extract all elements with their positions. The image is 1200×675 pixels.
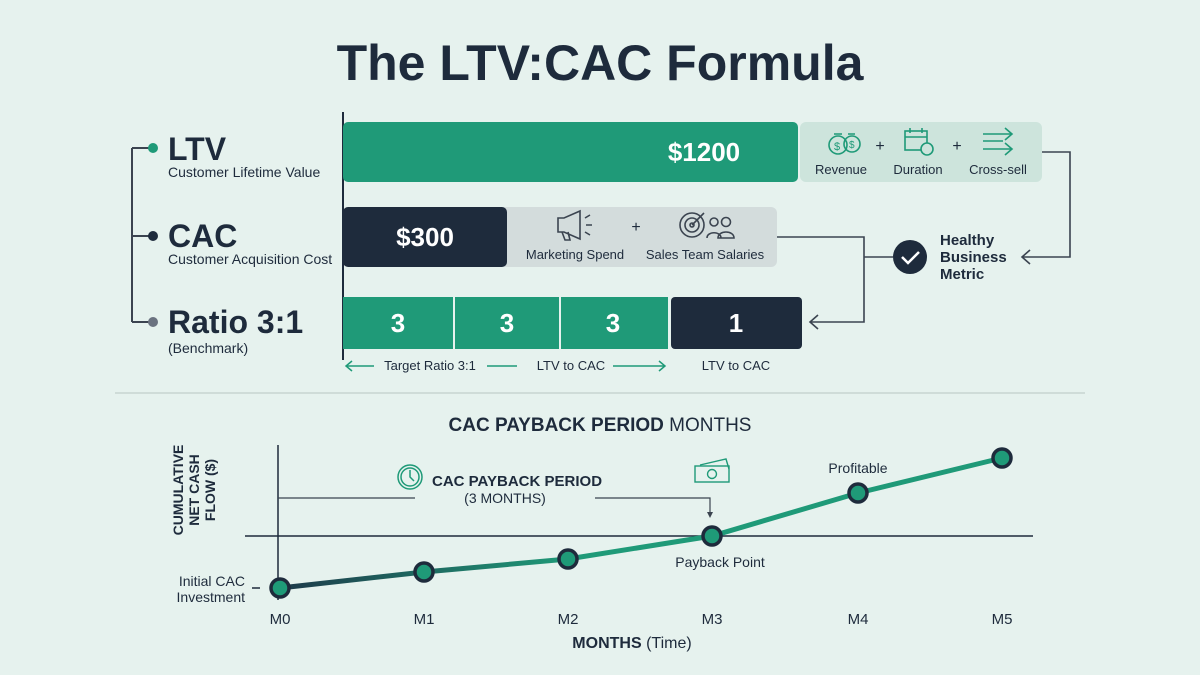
- left bracket with labels: [132, 131, 332, 356]
- ratio labels: Target Ratio 3:1: [384, 358, 476, 373]
- icon: money bags: $: [834, 141, 840, 153]
- line chart: M5: [992, 611, 1012, 628]
- y axis label: CUMULATIVE: [170, 445, 186, 535]
- ratio bars: 3: [500, 308, 514, 338]
- CAC bar: +: [631, 219, 641, 236]
- payback annotation: (3 MONTHS): [464, 490, 546, 506]
- LTV bar: $1200: [668, 137, 740, 167]
- chart title: CAC PAYBACK PERIOD MONTHS: [449, 415, 751, 436]
- callout: healthy business metric: Business: [940, 249, 1007, 266]
- label: Ratio: Ratio 3:1: [168, 304, 303, 340]
- line chart: [170, 445, 1033, 652]
- y axis label: NET CASH: [186, 454, 202, 526]
- label: Ratio: (Benchmark): [168, 340, 248, 356]
- label: CAC: Customer Acquisition Cost: [168, 251, 332, 267]
- icon: clock: [398, 465, 422, 489]
- icon: cash: [695, 459, 729, 482]
- axis line: [342, 112, 344, 360]
- ratio bars: 1: [729, 308, 743, 338]
- line chart: Investment: [177, 589, 245, 605]
- connector arrows: [777, 152, 1070, 329]
- CAC bar: Sales Team Salaries: [646, 247, 765, 262]
- callout: healthy business metric: Metric: [940, 266, 984, 283]
- line chart: MONTHS (Time): [572, 635, 692, 652]
- line chart: M0: [270, 611, 290, 628]
- LTV bar: +: [952, 138, 962, 155]
- label: CAC: CAC: [168, 218, 237, 254]
- label: LTV: [168, 131, 320, 180]
- line chart: M3: [702, 611, 722, 628]
- icon: cross-sell arrows: [983, 128, 1012, 155]
- line chart: M2: [558, 611, 578, 628]
- CAC bar: Marketing Spend: [526, 247, 624, 262]
- callout: healthy business metric: [893, 232, 1007, 283]
- LTV bar: +: [875, 138, 885, 155]
- ratio bars: 3: [391, 308, 405, 338]
- CAC bar: [343, 207, 777, 267]
- line chart: Initial CAC: [179, 573, 245, 589]
- LTV bar: Revenue: [815, 162, 867, 177]
- ratio labels: LTV to CAC: [537, 358, 605, 373]
- LTV bar: [343, 122, 1042, 182]
- label: LTV: LTV: [168, 131, 227, 167]
- icon: money bags: $: [849, 140, 855, 151]
- title: The LTV:CAC Formula: [337, 35, 865, 91]
- y axis label: [170, 445, 218, 535]
- icon: target and people: [680, 213, 734, 238]
- line chart: Profitable: [828, 460, 888, 476]
- line chart: Payback Point: [675, 554, 765, 570]
- icon: calendar: [905, 128, 933, 155]
- CAC bar: $300: [396, 222, 454, 252]
- LTV bar: Cross-sell: [969, 162, 1027, 177]
- ratio bars: 3: [606, 308, 620, 338]
- callout: healthy business metric: Healthy: [940, 232, 995, 249]
- label: Ratio: [168, 304, 303, 356]
- line chart: M1: [414, 611, 434, 628]
- ratio bars: [343, 297, 802, 349]
- label: LTV: Customer Lifetime Value: [168, 164, 320, 180]
- y axis label: FLOW ($): [202, 459, 218, 521]
- ratio labels: [346, 358, 770, 373]
- icon: megaphone: [558, 211, 592, 240]
- LTV bar: Duration: [893, 162, 943, 177]
- ratio labels: LTV to CAC: [702, 358, 770, 373]
- label: CAC: [168, 218, 332, 267]
- payback annotation: [278, 459, 729, 518]
- icon: money bags: [829, 134, 860, 154]
- payback annotation: CAC PAYBACK PERIOD: [432, 473, 602, 490]
- line chart: M4: [848, 611, 868, 628]
